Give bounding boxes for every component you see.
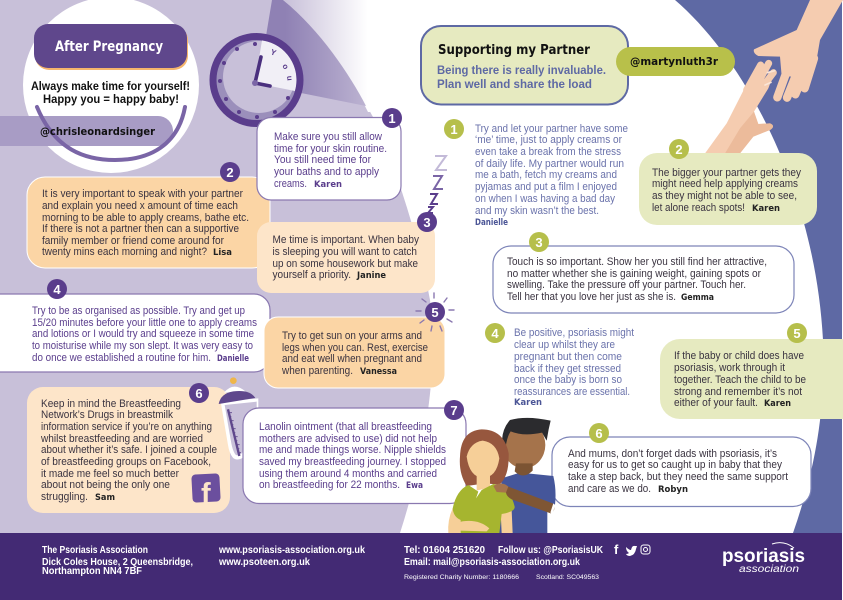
panel 7: lanolin: Ewa (406, 481, 423, 491)
panel 5: sun: Try to get sun on your arms and (282, 330, 422, 342)
panel 6: breastfeeding network: Network’s Drugs in breastmilk (41, 409, 174, 421)
psoriasis association logo: association (739, 564, 800, 575)
footer websites: www.psoteen.org.uk (218, 557, 310, 568)
panel 6: breastfeeding network: information service if you’re on anything (41, 421, 212, 433)
tip 6: dads (552, 423, 811, 506)
panel 5: sun: legs when you can. Rest, exercise (282, 342, 428, 354)
panel 2: partner: 2 (226, 165, 234, 180)
background: lavender left area (0, 0, 433, 533)
panel 6: breastfeeding network (27, 383, 230, 513)
panel 5: sun: 5 (431, 305, 439, 320)
clock time wedge (262, 0, 366, 106)
panel 4: organised (0, 279, 270, 372)
tip 4: be positive (485, 323, 634, 408)
panel 3: me time: Janine (356, 271, 386, 281)
panel 2: partner: It is very important to speak with your partner (42, 188, 243, 200)
tip 2: applying creams (639, 139, 817, 225)
tip 2: applying creams: 2 (675, 142, 683, 157)
tip 4: be positive: pregnant but then come (514, 351, 622, 363)
tip 3: touch: Tell her that you love her just as she is. (507, 291, 676, 303)
panel 3: me time: yourself a priority. (272, 269, 351, 281)
tip 2: applying creams: let alone reach spots! (652, 202, 745, 214)
icon: clock: o (280, 62, 291, 71)
panel 3: me time: is sleeping you will want to catch (272, 246, 417, 258)
tip 1: me time for partner: of daily life. My partner would run (475, 158, 624, 170)
panel 1: skin routine: You still need time for (274, 154, 371, 166)
panel 2: partner: Lisa (213, 248, 232, 258)
tip 3: touch: Gemma (681, 293, 714, 303)
tip 2: applying creams: as they might not be able to see, (652, 190, 797, 202)
panel 7: lanolin: mothers are advised to use) did not help (259, 433, 437, 445)
footer contact: Follow us: @PsoriasisUK (498, 545, 604, 556)
tagline: Always make time for yourself! (31, 80, 190, 93)
tagline (31, 80, 190, 106)
tip 1: me time for partner: on when I was having a bad day (475, 193, 616, 205)
panel 4: organised: Danielle (217, 354, 249, 364)
tip 1: me time for partner: pyjamas and put a film I enjoyed (475, 181, 617, 193)
panel 1: skin routine: creams. (274, 178, 307, 190)
tip 1: me time for partner: and my skin wasn’t the best. (475, 205, 599, 217)
icon: clock (213, 36, 300, 124)
tip 5: baby with psoriasis: strong and remember it’s not (674, 386, 802, 398)
tip 4: be positive: once the baby is born so (514, 374, 622, 386)
psoriasis association logo (722, 543, 805, 575)
illustration: reaching hands (705, 0, 843, 153)
tip 5: baby with psoriasis: If the baby or child does have (674, 350, 804, 362)
icon: baby bottle (219, 377, 258, 459)
icon: facebook (191, 473, 221, 510)
tip 3: touch (493, 232, 794, 313)
panel 3: me time: 3 (423, 215, 431, 230)
panel 4: organised: do once we established a routine for him. (32, 352, 211, 364)
tip 1: me time for partner: 1 (450, 122, 458, 137)
illustration: couple (448, 418, 556, 533)
tip 5: baby with psoriasis: 5 (793, 326, 801, 341)
tip 6: dads: Robyn (658, 485, 688, 495)
handle: martynluth3r (616, 47, 735, 76)
panel 4: organised: Try to be as organised as possible. Try and get up (32, 305, 245, 317)
tip 2: applying creams: Karen (752, 204, 780, 214)
social icons: f (614, 542, 619, 557)
footer contact: Tel: 01604 251620 (404, 545, 485, 556)
panel 5: sun (264, 293, 454, 388)
panel 7: lanolin: on breastfeeding for 22 months. (259, 479, 400, 491)
panel 2: partner: family member or friend come around for (42, 235, 224, 247)
tip 6: dads: 6 (595, 426, 603, 441)
icon: clock: u (285, 75, 294, 81)
heading panel: Supporting my Partner (421, 26, 628, 104)
tip 1: me time for partner (444, 119, 628, 228)
tip 6: dads: take a step back, but they need the same support (568, 471, 788, 483)
footer address (42, 545, 193, 577)
footer contact (404, 545, 604, 581)
white circle (23, 0, 199, 173)
tip 1: me time for partner: Try and let your partner have some (475, 123, 628, 135)
panel 6: breastfeeding network: of breastfeeding groups on Facebook, (41, 456, 211, 468)
clock light fade (283, 0, 370, 112)
panel 7: lanolin: Lanolin ointment (that all breastfeeding (259, 421, 432, 433)
panel 6: breastfeeding network: whilst breastfeeding and are worried (40, 433, 203, 445)
psoriasis association logo: psoriasis (722, 546, 805, 567)
handle: martynluth3r: @martynluth3r (630, 56, 719, 68)
panel 6: breastfeeding network: it made me feel so much better (41, 468, 179, 480)
tip 2: applying creams: might need help applying creams (652, 178, 799, 190)
panel 6: breastfeeding network: Keep in mind the Breastfeeding (41, 398, 181, 410)
heading panel: Supporting my Partner: Being there is really invaluable. (437, 63, 606, 77)
panel 7: lanolin: saved my breastfeeding journey. I stopped (259, 456, 446, 468)
footer (0, 533, 842, 600)
heading: After Pregnancy: After Pregnancy (55, 39, 163, 55)
tip 4: be positive: reassurances are essential. (514, 386, 630, 398)
tip 3: touch: 3 (535, 235, 543, 250)
tip 5: baby with psoriasis: psoriasis, work through it (674, 362, 785, 374)
tip 1: me time for partner: Danielle (475, 218, 508, 228)
footer websites: www.psoriasis-association.org.uk (218, 545, 365, 556)
tip 2: applying creams: The bigger your partner gets they (652, 167, 802, 179)
panel 4: organised: 15/20 minutes before your little one to apply creams (32, 317, 258, 329)
footer contact: Email: mail@psoriasis-association.org.uk (404, 557, 580, 568)
tip 4: be positive: Be positive, psoriasis might (514, 327, 634, 339)
panel 6: breastfeeding network: about whether it’s safe. I joined a couple (41, 444, 217, 456)
panel 2: partner: morning to be able to apply creams, bathe etc. (42, 212, 249, 224)
panel 1: skin routine: time for your skin routine. (274, 143, 387, 155)
heading panel: Supporting my Partner: Supporting my Partner (438, 42, 590, 58)
tip 4: be positive: clear up whilst they are (514, 339, 615, 351)
panel 6: breastfeeding network: 6 (195, 386, 203, 401)
tip 3: touch: Touch is so important. Show her you still find her attractive, (507, 256, 767, 268)
panel 2: partner: and explain you need x amount of time each (42, 200, 238, 212)
panel 2: partner: twenty mins each morning and night? (42, 246, 207, 258)
panel 4: organised: and lotions or I would try and squeeze in some time (32, 328, 254, 340)
panel 3: me time: Me time is important. When baby (272, 234, 420, 246)
panel 1: skin routine (257, 108, 402, 200)
heading: After Pregnancy (34, 24, 188, 70)
panel 6: breastfeeding network: struggling. (41, 491, 88, 503)
panel 5: sun: when parenting. (281, 365, 353, 377)
footer websites (218, 545, 365, 568)
panel 6: breastfeeding network: about not being the only one (41, 479, 170, 491)
tip 4: be positive: Karen (514, 398, 542, 408)
panel 7: lanolin (243, 400, 466, 504)
footer address: The Psoriasis Association (42, 545, 148, 556)
tip 3: touch: no matter whether she is gaining weight, gaining spots or (507, 268, 761, 280)
tip 1: me time for partner: ‘me’ time, just to apply creams or (475, 134, 622, 146)
tip 5: baby with psoriasis: together. Teach the child to be (674, 374, 806, 386)
tip 6: dads: easy for us to get so caught up in baby that they (568, 459, 783, 471)
panel 2: partner (27, 162, 270, 268)
handle: chrisleonardsinger: @chrisleonardsinger (40, 126, 156, 138)
tip 4: be positive: 4 (491, 326, 499, 341)
background: blue right area (675, 0, 842, 533)
tip 5: baby with psoriasis: either of your fault. (674, 397, 758, 409)
panel 7: lanolin: 7 (450, 403, 458, 418)
panel 1: skin routine: 1 (388, 111, 396, 126)
panel 1: skin routine: Karen (314, 180, 342, 190)
tip 1: me time for partner: even take a break from the stress (475, 146, 622, 158)
tip 5: baby with psoriasis (660, 323, 843, 419)
panel 5: sun: Vanessa (360, 367, 397, 377)
panel 4: organised: 4 (53, 282, 61, 297)
panel 2: partner: If there is not a partner then can a supportive (42, 223, 239, 235)
panel 6: breastfeeding network: Sam (95, 493, 115, 503)
tagline: Happy you = happy baby! (43, 93, 179, 106)
panel 1: skin routine: Make sure you still allow (274, 131, 382, 143)
panel 7: lanolin: using them around 4 months and carried (259, 468, 437, 480)
heading panel: Supporting my Partner: Plan well and share the load (437, 77, 592, 91)
tip 6: dads: and care as we do. (568, 483, 651, 495)
icon: sleeping Zs (428, 156, 447, 213)
panel 4: organised: to moisturise while my son slept. It was very easy to (32, 340, 253, 352)
footer address: Northampton NN4 7BF (42, 566, 142, 577)
social icons (614, 542, 650, 557)
handle: chrisleonardsinger (0, 107, 185, 160)
tip 3: touch: swelling. Take the pressure off your partner. Touch her. (507, 279, 746, 291)
panel 5: sun: and eat well when pregnant and (282, 353, 422, 365)
icon: clock: Y (269, 47, 278, 58)
panel 1: skin routine: your baths and to apply (274, 166, 380, 178)
icon: facebook: f (201, 478, 211, 510)
tip 1: me time for partner: me a bath, fetch my creams and (475, 169, 617, 181)
tip 4: be positive: back if they get stressed (514, 363, 621, 375)
panel 7: lanolin: me and made things worse. Nipple shields (259, 444, 447, 456)
footer contact: Registered Charity Number: 1180666 (404, 574, 519, 581)
tip 5: baby with psoriasis: Karen (764, 399, 791, 409)
footer address: Dick Coles House, 2 Queensbridge, (42, 557, 193, 568)
panel 3: me time: up on some housework but make (272, 258, 418, 270)
panel 3: me time (257, 212, 437, 293)
footer contact: Scotland: SC049563 (536, 574, 599, 581)
tip 6: dads: And mums, don’t forget dads with psoriasis, it’s (568, 448, 778, 460)
